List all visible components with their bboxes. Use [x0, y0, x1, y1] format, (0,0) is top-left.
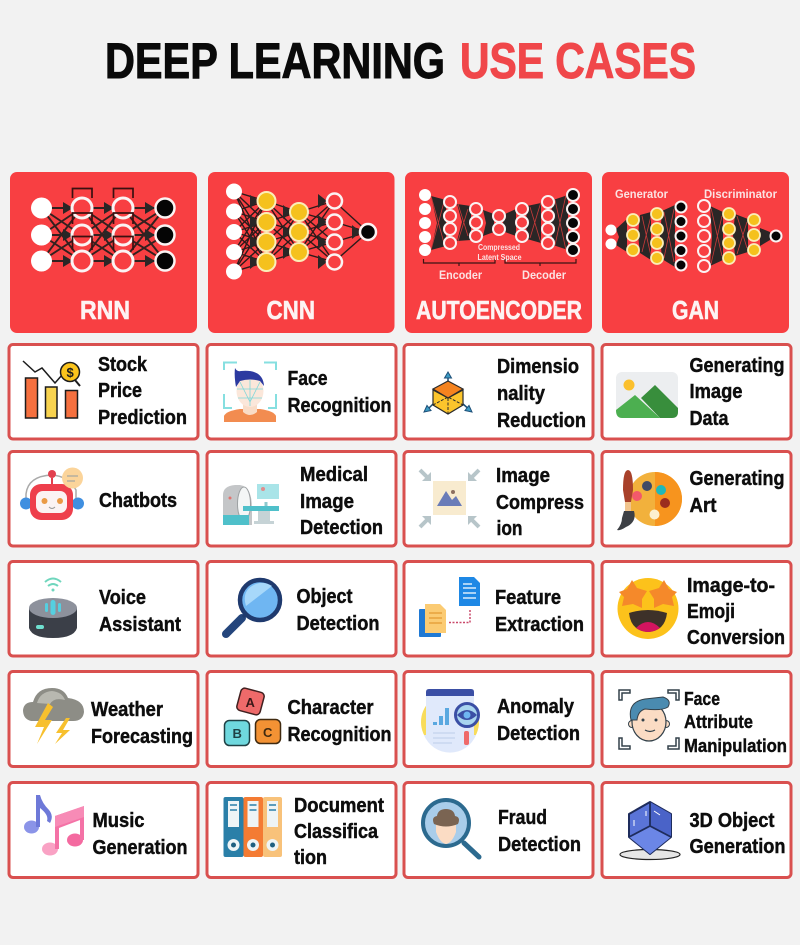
- icon: 3D cube on base: [620, 802, 680, 860]
- label: AUTOENCODER: AUTOENCODER: [416, 295, 582, 325]
- label: Generation: [690, 836, 786, 858]
- icon: cube with axes: [424, 372, 472, 414]
- icon: documents: [419, 577, 480, 637]
- label: Detection: [296, 613, 380, 635]
- label: Image: [496, 465, 550, 487]
- icon: storm cloud: [23, 688, 84, 744]
- title: USE CASES: [460, 33, 696, 89]
- card: Weather Forecasting: [9, 672, 198, 766]
- label: Image: [300, 491, 354, 513]
- card: Feature Extraction: [404, 562, 593, 656]
- label: Voice: [99, 587, 146, 609]
- diagram: GAN network: Generator: [615, 187, 668, 201]
- label: 3D Object: [690, 810, 775, 832]
- card: Voice Assistant: [9, 562, 198, 656]
- label: [495, 587, 584, 636]
- label: [99, 587, 181, 636]
- label: ion: [496, 518, 522, 540]
- icon: face scan: [224, 362, 276, 422]
- label: Document: [294, 795, 384, 817]
- label: Recognition: [288, 724, 392, 746]
- icon: stock chart: [23, 361, 80, 418]
- icon: landscape image: [616, 372, 678, 418]
- icon: stock chart: $: [66, 365, 74, 380]
- diagram: GAN network: Discriminator: [704, 187, 777, 201]
- label: Detection: [498, 834, 581, 856]
- icon: paint palette: [617, 470, 682, 530]
- card: Generating Art: [602, 452, 791, 546]
- label: Dimensio: [497, 356, 579, 378]
- label: Face: [288, 368, 328, 390]
- label: [288, 368, 392, 417]
- card: Face Recognition: [207, 344, 396, 439]
- diagram: GAN network: [606, 187, 782, 272]
- diagram: Autoencoder network: Latent Space: [478, 252, 522, 262]
- label: Detection: [497, 723, 580, 745]
- card: Image Compression: [404, 452, 593, 546]
- label: Image: [690, 381, 742, 403]
- label: Weather: [91, 699, 163, 721]
- card: Stock Price Prediction: [9, 344, 198, 439]
- label: Compress: [496, 492, 584, 514]
- label: Attribute: [684, 712, 753, 732]
- label: [288, 697, 392, 746]
- label: Emoji: [687, 601, 735, 623]
- card: Document Classification: [207, 782, 396, 878]
- label: [684, 689, 787, 756]
- panel: RNN header: [10, 172, 197, 333]
- label: Chatbots: [99, 490, 177, 512]
- label: Data: [690, 408, 729, 430]
- label: Price: [98, 380, 142, 402]
- card: Image-to-Emoji Conversion: [602, 562, 791, 656]
- card: Chatbots: [9, 452, 198, 546]
- panel: GAN header: [602, 172, 789, 333]
- label: [690, 468, 784, 517]
- label: [497, 696, 580, 745]
- label: Music: [92, 810, 144, 832]
- icon: binders: [224, 797, 282, 857]
- label: GAN: GAN: [672, 295, 719, 325]
- title: DEEP LEARNING: [105, 33, 445, 89]
- label: [690, 810, 786, 858]
- diagram: RNN network: [31, 188, 174, 272]
- label: RNN: RNN: [80, 295, 130, 325]
- label: [294, 795, 384, 869]
- card: Medical Image Detection: [207, 452, 396, 546]
- card: 3D Object Generation: [602, 782, 791, 878]
- label: Art: [690, 495, 717, 517]
- label: [296, 586, 380, 635]
- icon: letter blocks: C: [263, 725, 273, 740]
- label: Conversion: [687, 627, 785, 649]
- card: Generating Image Data: [602, 344, 791, 439]
- label: [690, 355, 784, 430]
- label: Forecasting: [91, 726, 193, 748]
- card: Anomaly Detection: [404, 672, 593, 766]
- diagram: Autoencoder network: [419, 189, 579, 282]
- diagram: Autoencoder network: Compressed: [478, 242, 520, 252]
- label: Generating: [690, 468, 784, 490]
- card: Dimensionality Reduction: [404, 344, 593, 439]
- icon: detective in magnifier: [423, 800, 479, 857]
- label: [98, 354, 187, 429]
- label: Recognition: [288, 395, 392, 417]
- label: Generation: [92, 837, 188, 859]
- icon: magnifying glass: [226, 580, 280, 634]
- panel: CNN header: [208, 172, 394, 333]
- icon: medical scanner: [223, 484, 279, 525]
- label: Image-to-: [687, 575, 775, 597]
- card: Face Attribute Manipulation: [602, 672, 791, 766]
- label: [497, 356, 586, 432]
- icon: smart speaker: [29, 578, 77, 638]
- label: Stock: [98, 354, 148, 376]
- label: Character: [288, 697, 374, 719]
- icon: image compress: [420, 470, 479, 527]
- label: tion: [294, 847, 327, 869]
- label: Manipulation: [684, 736, 787, 756]
- label: Extraction: [495, 614, 584, 636]
- card: Music Generation: [9, 782, 198, 878]
- label: [496, 465, 584, 540]
- label: [498, 807, 581, 856]
- label: Fraud: [498, 807, 547, 829]
- label: Assistant: [99, 614, 181, 636]
- label: [92, 810, 188, 859]
- label: Reduction: [497, 410, 586, 432]
- label: nality: [497, 383, 546, 405]
- icon: letter blocks: B: [232, 726, 242, 741]
- label: Detection: [300, 517, 383, 539]
- diagram: Autoencoder network: Encoder: [439, 268, 482, 282]
- title: [105, 33, 696, 89]
- icon: star-eyes emoji: [618, 578, 678, 639]
- icon: dashboard with magnifier: [421, 689, 479, 753]
- icon: face frame: [619, 690, 679, 749]
- card: Object Detection: [207, 562, 396, 656]
- icon: robot: [20, 468, 84, 520]
- icon: letter blocks: A: [246, 695, 256, 710]
- label: Face: [684, 689, 720, 709]
- icon: letter blocks: [224, 687, 280, 746]
- label: Generating: [690, 355, 784, 377]
- label: Classifica: [294, 821, 379, 843]
- label: Feature: [495, 587, 561, 609]
- label: Medical: [300, 464, 368, 486]
- card: Fraud Detection: [404, 782, 593, 878]
- label: Anomaly: [497, 696, 575, 718]
- panel: Autoencoder header: [405, 172, 592, 333]
- diagram: Autoencoder network: Decoder: [522, 268, 566, 282]
- label: CNN: CNN: [266, 295, 315, 325]
- icon: music notes: [24, 795, 84, 856]
- diagram: CNN network: [226, 184, 376, 280]
- card: Character Recognition: [207, 672, 396, 766]
- label: [91, 699, 193, 748]
- label: Prediction: [98, 407, 187, 429]
- label: [687, 575, 785, 649]
- label: Object: [296, 586, 353, 608]
- label: [300, 464, 383, 539]
